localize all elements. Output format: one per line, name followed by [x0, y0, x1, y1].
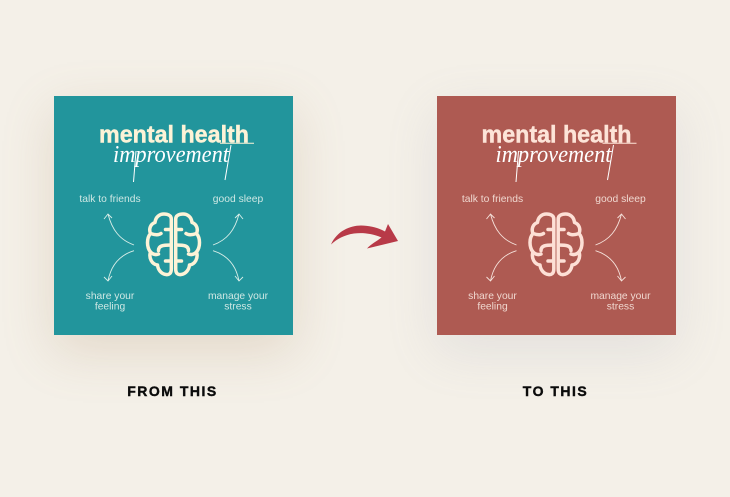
label: talk to friends: talk to friends	[79, 194, 141, 205]
label: manage your stress: stress	[224, 302, 252, 312]
label: good sleep: good sleep	[595, 194, 646, 205]
label: share your feeling: share your	[86, 291, 134, 302]
script subheading: improvement: improvement	[496, 142, 613, 168]
label: manage your stress: stress	[607, 302, 634, 312]
design: to this	[462, 122, 651, 312]
heading: mental health: mental health	[482, 122, 632, 148]
panel: teal before card shadow	[54, 96, 293, 335]
arrows to labels	[486, 214, 626, 281]
panel: red after card shadow	[436, 96, 676, 335]
script descenders	[134, 145, 231, 182]
script subheading: improvement: improvement	[113, 142, 230, 168]
icon: brain	[148, 214, 200, 275]
label: share your feeling: feeling	[95, 302, 125, 312]
heading underline	[602, 142, 636, 144]
label: good sleep: good sleep	[213, 194, 263, 205]
label: talk to friends: talk to friends	[462, 194, 523, 205]
label: share your feeling: feeling	[477, 302, 508, 312]
icon: brain	[530, 214, 582, 275]
arrows to labels	[104, 214, 243, 281]
caption: to this: TO THIS	[523, 383, 588, 399]
script descenders	[516, 145, 614, 182]
label: manage your stress: manage your	[590, 291, 651, 302]
label: share your feeling: share your	[468, 291, 517, 302]
arrow: from before to after	[331, 224, 398, 248]
design: from this	[79, 122, 269, 312]
heading: mental health: mental health	[99, 122, 249, 148]
label: manage your stress: manage your	[208, 291, 268, 302]
caption: from this: FROM THIS	[127, 383, 218, 399]
heading underline	[220, 142, 254, 144]
